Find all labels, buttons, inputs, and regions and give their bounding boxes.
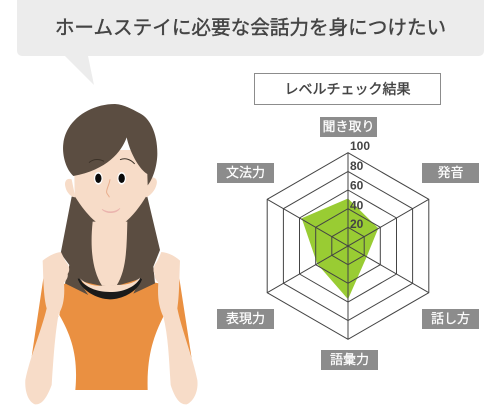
label: pronunciation: 発音 xyxy=(437,165,464,180)
nose xyxy=(107,179,110,197)
label: expression xyxy=(217,309,274,328)
left arm and fist xyxy=(25,252,69,404)
label: vocabulary xyxy=(321,350,378,370)
collar skin xyxy=(80,278,140,293)
necklace xyxy=(78,278,142,299)
label: grammar xyxy=(217,163,274,182)
ears xyxy=(65,178,157,197)
scale labels: 20 xyxy=(350,217,364,231)
eyes xyxy=(94,172,103,185)
scale labels: 80 xyxy=(350,159,364,173)
sleeves xyxy=(32,278,192,358)
label: vocabulary: 語彙力 xyxy=(330,352,369,367)
data polygon xyxy=(302,198,378,299)
scale labels: 40 xyxy=(350,198,364,212)
radar grid xyxy=(267,153,429,339)
front hair xyxy=(63,104,157,185)
label: expression: 表現力 xyxy=(226,311,265,326)
label: grammar: 文法力 xyxy=(226,165,265,180)
back hair xyxy=(61,197,160,295)
label: speaking: 話し方 xyxy=(431,311,470,326)
eyebrows xyxy=(89,159,135,164)
label: listening: 聞き取り xyxy=(322,119,374,134)
scale labels: 100 xyxy=(350,139,370,153)
face xyxy=(74,150,148,229)
neck xyxy=(92,222,127,286)
results heading box xyxy=(254,73,441,105)
results heading box: レベルチェック結果 xyxy=(284,81,410,97)
shirt xyxy=(59,280,163,390)
label: pronunciation xyxy=(422,163,479,182)
right arm and fist xyxy=(153,252,198,404)
title: ホームステイに必要な会話力を身につけたい xyxy=(55,17,446,39)
label: speaking xyxy=(422,309,479,328)
mouth xyxy=(102,208,120,213)
scale labels xyxy=(350,139,370,231)
scale labels: 60 xyxy=(350,178,364,192)
